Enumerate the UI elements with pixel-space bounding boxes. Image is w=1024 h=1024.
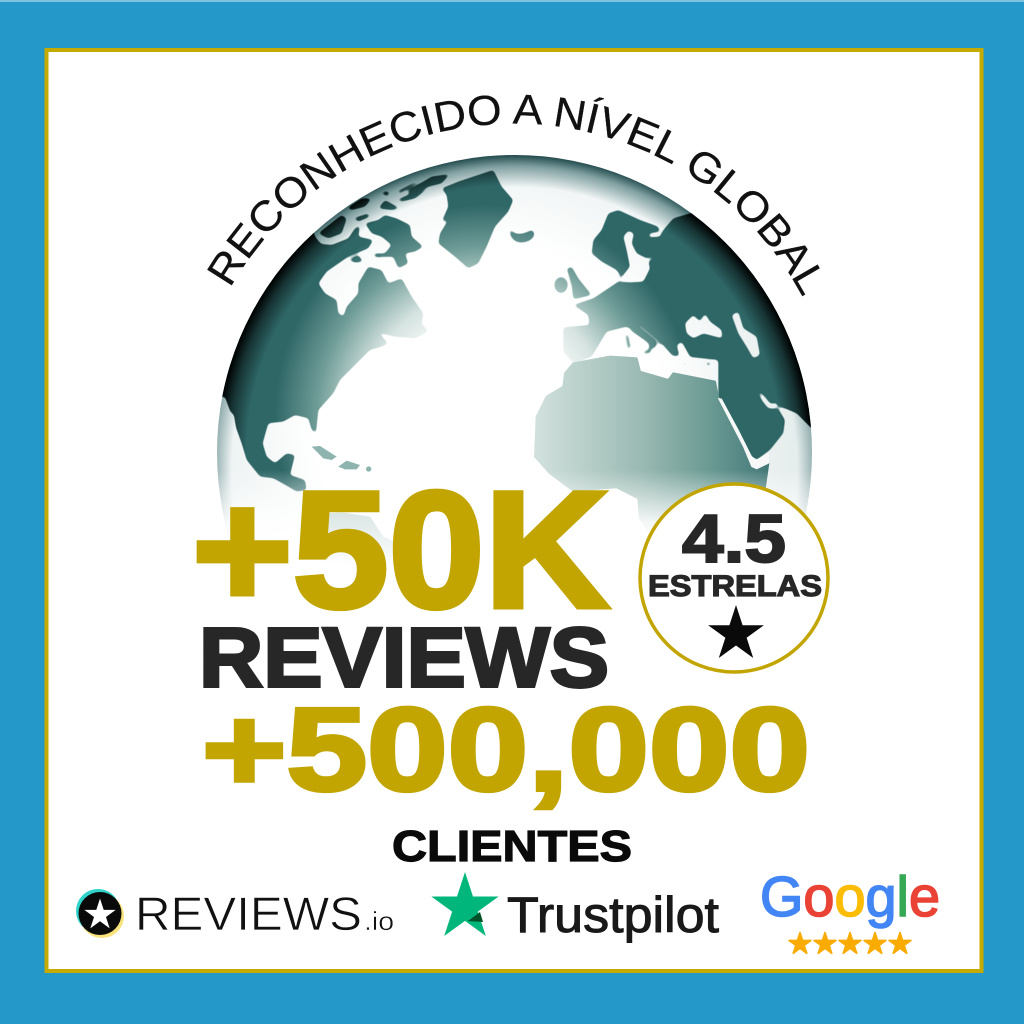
wordmark: REVIEWS: [135, 887, 362, 940]
globe: [217, 155, 812, 554]
logo: REVIEWS.io: [76, 887, 394, 940]
logo: Google: [760, 865, 940, 953]
icon: trustpilot star: [431, 872, 499, 936]
headline: CLIENTES: CLIENTES: [392, 822, 632, 871]
icon: star: [708, 605, 764, 658]
Red Sea: [718, 398, 769, 469]
rating badge: [640, 484, 828, 672]
wordmark: Trustpilot: [507, 887, 719, 943]
logo: Trustpilot: [431, 872, 719, 943]
Caribbean islands: [312, 446, 371, 472]
five stars: [789, 932, 911, 953]
rating label: ESTRELAS: [648, 570, 822, 603]
wordmark: Google: [760, 865, 940, 929]
South America: [328, 512, 393, 554]
icon: reviews.io badge: [76, 889, 124, 938]
Africa: [535, 357, 768, 533]
curved title: RECONHECIDO A NÍVEL GLOBAL: [207, 94, 820, 296]
headline: REVIEWS: REVIEWS: [199, 610, 609, 704]
wordmark suffix: .io: [364, 906, 394, 936]
rating value: 4.5: [682, 501, 786, 577]
bottom fade: [200, 470, 830, 570]
headline: +500,000: +500,000: [202, 684, 810, 816]
headline: +50K: +50K: [192, 458, 609, 643]
